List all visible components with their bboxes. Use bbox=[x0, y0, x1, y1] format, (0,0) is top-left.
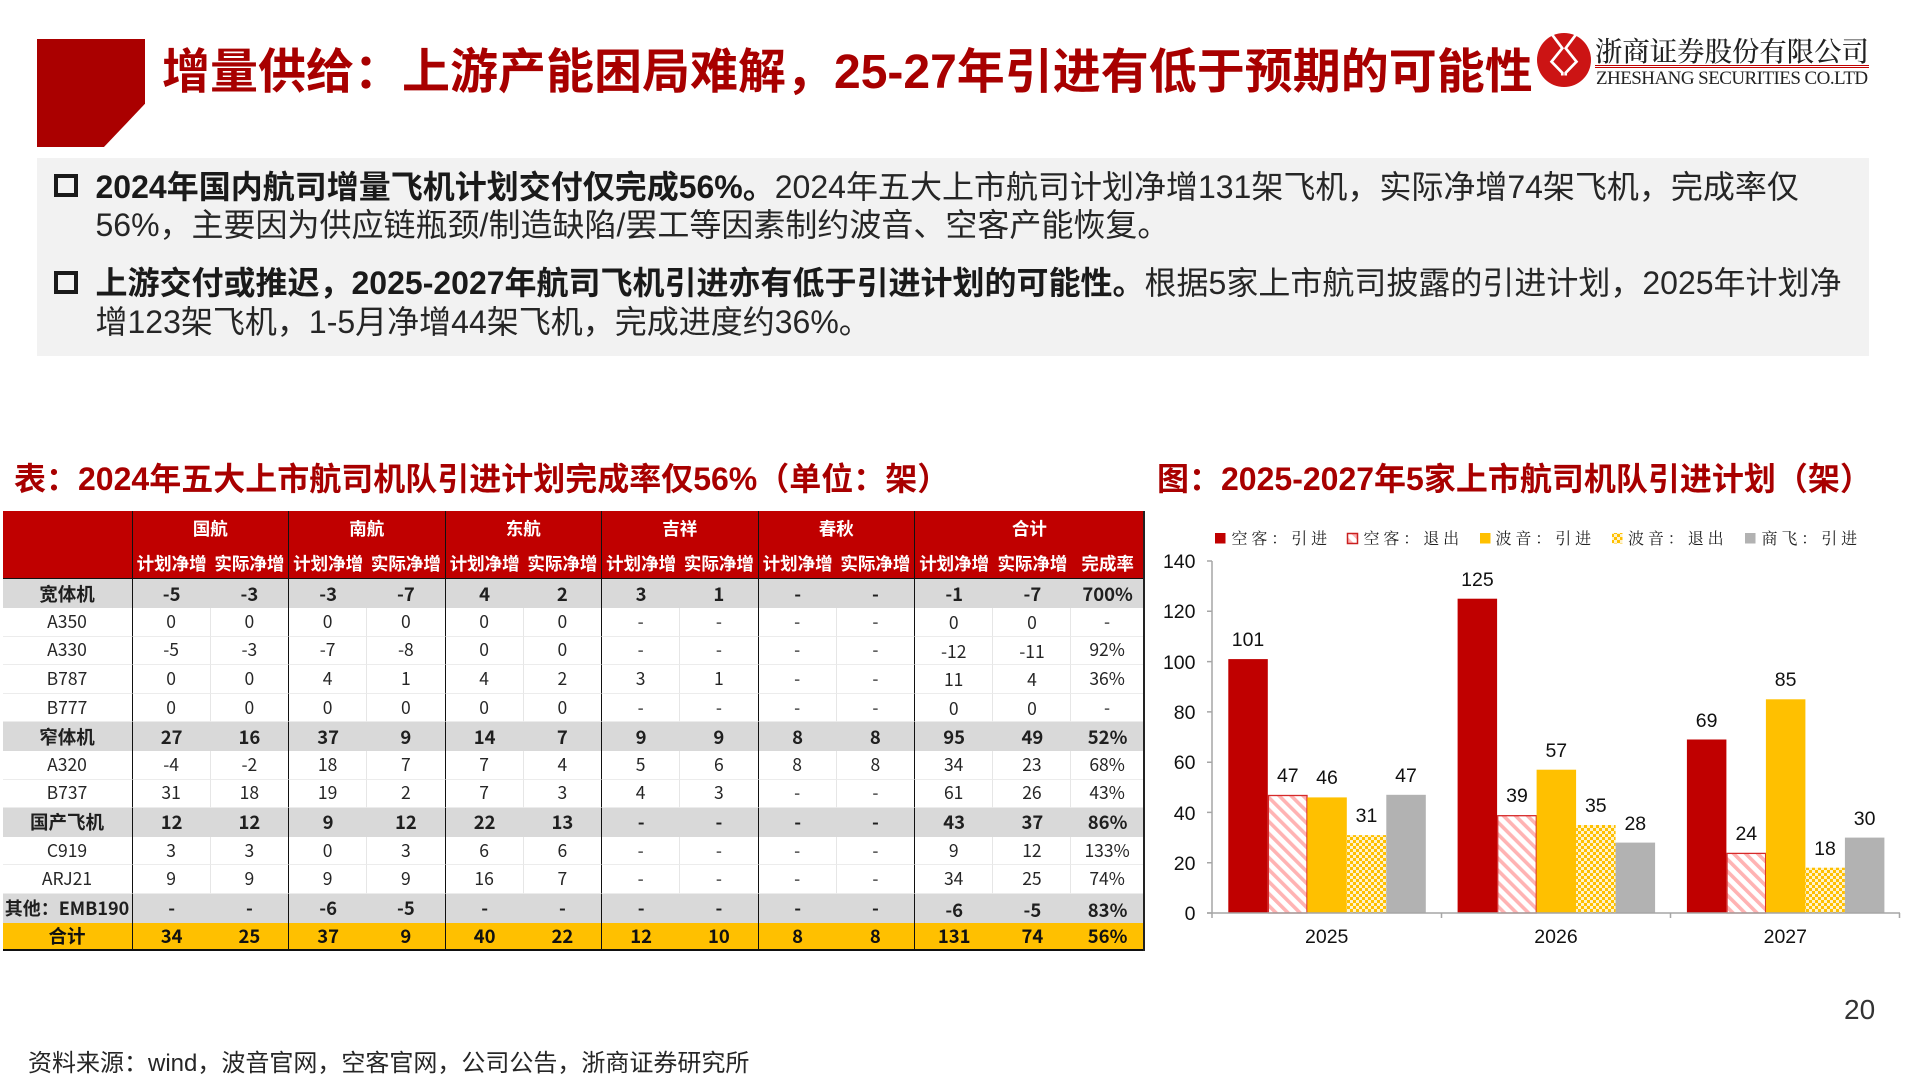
row: 宽体机 bbox=[3, 579, 1143, 608]
row: B777: 0 bbox=[323, 695, 332, 720]
row: 其他 EMB190: - bbox=[559, 895, 566, 921]
icon: logo emblem bbox=[1537, 33, 1591, 87]
row: 合计: 74 bbox=[1022, 923, 1043, 949]
row: C919: C919 bbox=[47, 838, 87, 863]
row: 国产飞机: - bbox=[715, 809, 722, 835]
table header: airlines: 春秋 bbox=[819, 516, 854, 541]
row: 其他 EMB190: - bbox=[715, 895, 722, 921]
row: ARJ21: 7 bbox=[558, 866, 567, 891]
row: 宽体机: 1 bbox=[713, 581, 724, 607]
row: C919: 3 bbox=[245, 838, 254, 863]
row: A330: -11 bbox=[1019, 639, 1045, 664]
table header: airlines: 合计 bbox=[1012, 516, 1047, 541]
row: B777: - bbox=[872, 695, 878, 720]
y axis labels: 60 bbox=[1174, 752, 1196, 774]
row: ARJ21: - bbox=[716, 866, 722, 891]
data labels: 31 bbox=[1356, 805, 1377, 827]
row: A320: 68% bbox=[1089, 752, 1125, 777]
row: A330 bbox=[3, 637, 1143, 665]
row: 窄体机: 52% bbox=[1088, 724, 1127, 750]
row: B737: 26 bbox=[1022, 780, 1042, 805]
legend: 空客：引进 bbox=[1232, 526, 1331, 549]
y axis bbox=[1207, 561, 1212, 913]
row: A320: 8 bbox=[871, 752, 880, 777]
row: B737: 43% bbox=[1089, 780, 1125, 805]
row: 合计: 合计 bbox=[48, 923, 86, 949]
bars: 2027 bbox=[1687, 699, 1884, 913]
table header: metrics: 完成率 bbox=[1081, 551, 1134, 576]
row: A330: A330 bbox=[47, 637, 87, 662]
row: A320: 8 bbox=[792, 752, 802, 777]
row: 国产飞机 bbox=[3, 808, 1143, 837]
table: 2024 fleet plan completion bbox=[3, 511, 1143, 951]
row: A350: 0 bbox=[1027, 610, 1037, 635]
row: C919: - bbox=[716, 838, 722, 863]
row: 其他 EMB190: -5 bbox=[397, 895, 415, 921]
row: B787: - bbox=[872, 666, 878, 691]
row: 窄体机: 9 bbox=[636, 724, 647, 750]
row: 国产飞机: 国产飞机 bbox=[30, 809, 104, 835]
y axis labels: 20 bbox=[1174, 853, 1196, 875]
row: B737: 61 bbox=[944, 780, 963, 805]
row: B777: 0 bbox=[1027, 696, 1037, 721]
row: 窄体机: 37 bbox=[317, 724, 339, 750]
data labels: 28 bbox=[1624, 813, 1646, 835]
row: B737: B737 bbox=[47, 780, 87, 805]
panel: key points bbox=[37, 158, 1869, 356]
row: B777: 0 bbox=[245, 695, 254, 720]
row: 宽体机: 700% bbox=[1082, 581, 1133, 607]
table header: metrics: 实际净增 bbox=[997, 551, 1067, 576]
bullet 2 text line 1: 上游交付或推迟，2025-2027年航司飞机引进亦有低于引进计划的可能性。根据5家上市航司披露的引进计划，2025年计划净 bbox=[96, 265, 1842, 301]
row: A350: 0 bbox=[479, 609, 489, 634]
bullet 1 text line 1: 2024年国内航司增量飞机计划交付仅完成56%。2024年五大上市航司计划净增131架飞机，实际净增74架飞机，完成率仅 bbox=[96, 169, 1799, 205]
row: B787: 3 bbox=[636, 666, 645, 691]
table header: metrics: 计划净增 bbox=[293, 551, 363, 576]
row: 国产飞机: - bbox=[638, 809, 645, 835]
data labels: 101 bbox=[1232, 629, 1264, 651]
bars: 2025 bbox=[1228, 659, 1426, 913]
row: B737: 7 bbox=[479, 780, 489, 805]
data labels: 24 bbox=[1735, 823, 1757, 845]
row: 其他 EMB190: - bbox=[481, 895, 488, 921]
row: B777 bbox=[3, 694, 1143, 722]
table right edge bbox=[1143, 511, 1144, 951]
row: B737: 18 bbox=[240, 780, 259, 805]
row: A330: -7 bbox=[320, 637, 336, 662]
row: 合计: 40 bbox=[474, 923, 496, 949]
data labels bbox=[1232, 569, 1876, 860]
row: A320: 4 bbox=[558, 752, 567, 777]
row: 宽体机: 2 bbox=[557, 581, 568, 607]
row: 窄体机: 8 bbox=[792, 724, 803, 750]
row: 合计: 9 bbox=[400, 923, 411, 949]
legend: 空客：退出 bbox=[1364, 526, 1463, 549]
row: A330: - bbox=[794, 637, 800, 662]
row: C919: - bbox=[794, 838, 800, 863]
table header: metrics: 计划净增 bbox=[919, 551, 989, 576]
row: C919: 0 bbox=[323, 838, 332, 863]
logo English name: ZHESHANG SECURITIES CO.LTD bbox=[1596, 68, 1868, 89]
bullet 2 text line 2: 增123架飞机，1-5月净增44架飞机，完成进度约36%。 bbox=[96, 304, 871, 340]
data labels: 47 bbox=[1277, 765, 1299, 787]
row: ARJ21: ARJ21 bbox=[42, 866, 92, 891]
row: C919: 9 bbox=[949, 838, 959, 863]
row: 其他 EMB190: - bbox=[168, 895, 175, 921]
row: A330: -8 bbox=[398, 637, 414, 662]
row: C919 bbox=[3, 837, 1143, 865]
row: A320: 23 bbox=[1022, 752, 1042, 777]
row: B787: 4 bbox=[323, 666, 332, 691]
row: 国产飞机: 12 bbox=[238, 809, 260, 835]
row: C919: 12 bbox=[1022, 838, 1042, 863]
source note: 资料来源：wind，波音官网，空客官网，公司公告，浙商证券研究所 bbox=[28, 1050, 749, 1077]
row: 合计: 8 bbox=[870, 923, 881, 949]
row: B787: 4 bbox=[1027, 667, 1037, 692]
row: 窄体机 bbox=[3, 722, 1143, 751]
row: 国产飞机: 12 bbox=[161, 809, 183, 835]
row: 宽体机: 3 bbox=[636, 581, 647, 607]
row: 合计: 12 bbox=[630, 923, 652, 949]
row: C919: 6 bbox=[558, 838, 567, 863]
row: 其他 EMB190: -5 bbox=[1024, 897, 1041, 923]
bullet 2 icon bbox=[54, 271, 78, 294]
row: A330: 92% bbox=[1089, 637, 1125, 662]
row: 合计: 37 bbox=[317, 923, 339, 949]
row: ARJ21: 9 bbox=[166, 866, 176, 891]
row: 宽体机: -7 bbox=[397, 581, 415, 607]
row: A350: 0 bbox=[558, 609, 567, 634]
row: A330: - bbox=[638, 637, 644, 662]
row: 国产飞机: 86% bbox=[1088, 809, 1127, 835]
row: A320: A320 bbox=[47, 752, 87, 777]
bars: 2026 bbox=[1458, 599, 1655, 913]
table header: metrics: 计划净增 bbox=[763, 551, 833, 576]
y axis labels: 140 bbox=[1163, 551, 1196, 573]
row: 窄体机: 49 bbox=[1022, 724, 1043, 750]
row: 宽体机: - bbox=[794, 581, 801, 607]
row: B737: 3 bbox=[558, 780, 567, 805]
row: A350: - bbox=[638, 609, 644, 634]
row: B787: 1 bbox=[401, 666, 411, 691]
data labels: 47 bbox=[1395, 765, 1417, 787]
table header: metrics: 实际净增 bbox=[371, 551, 441, 576]
row: A320: 18 bbox=[318, 752, 337, 777]
row: 宽体机: -7 bbox=[1024, 581, 1041, 607]
y axis labels: 100 bbox=[1163, 652, 1196, 674]
row: 其他 EMB190: -6 bbox=[945, 897, 963, 923]
table header: metrics: 实际净增 bbox=[214, 551, 284, 576]
row: A350: 0 bbox=[949, 610, 959, 635]
row: A350: 0 bbox=[166, 609, 176, 634]
row: 合计: 56% bbox=[1088, 923, 1127, 949]
legend bbox=[1215, 526, 1861, 549]
row: 合计: 34 bbox=[161, 923, 183, 949]
table header: airlines: 吉祥 bbox=[662, 516, 697, 541]
row: B787: 0 bbox=[166, 666, 176, 691]
row: 窄体机: 95 bbox=[943, 724, 965, 750]
row: B777: 0 bbox=[479, 695, 489, 720]
row: A330: -12 bbox=[941, 639, 966, 664]
row: 国产飞机: - bbox=[872, 809, 879, 835]
row: 其他 EMB190: 83% bbox=[1088, 897, 1127, 923]
row: B777: - bbox=[1104, 695, 1110, 720]
row: 国产飞机: 37 bbox=[1022, 809, 1043, 835]
row: C919: - bbox=[638, 838, 644, 863]
row: 国产飞机: 22 bbox=[474, 809, 496, 835]
logo Chinese name: 浙商证券股份有限公司 bbox=[1595, 29, 1869, 69]
row: ARJ21: 9 bbox=[401, 866, 411, 891]
row: 其他 EMB190: - bbox=[794, 895, 801, 921]
chart heading: 图：2025-2027年5家上市航司机队引进计划（架） bbox=[1157, 461, 1872, 497]
row: B787: - bbox=[794, 666, 800, 691]
row: 窄体机: 14 bbox=[474, 724, 496, 750]
x axis labels: 2025 bbox=[1305, 926, 1349, 948]
row: A350: 0 bbox=[323, 609, 332, 634]
table header: metrics: 实际净增 bbox=[684, 551, 754, 576]
row: 合计: 10 bbox=[708, 923, 730, 949]
row: A320: 7 bbox=[479, 752, 489, 777]
row: 合计 bbox=[3, 923, 1143, 951]
row: 宽体机: 4 bbox=[479, 581, 490, 607]
row: C919: 3 bbox=[166, 838, 176, 863]
row: ARJ21 bbox=[3, 865, 1143, 894]
row: B777: - bbox=[716, 695, 722, 720]
row: A320: 6 bbox=[714, 752, 724, 777]
row: A350: 0 bbox=[245, 609, 254, 634]
row: 国产飞机: - bbox=[794, 809, 801, 835]
data labels: 39 bbox=[1506, 785, 1528, 807]
row: A320 bbox=[3, 751, 1143, 780]
row: B777: - bbox=[794, 695, 800, 720]
chart: fleet introduction plan 2025-2027 bbox=[1163, 526, 1900, 948]
row: ARJ21: 74% bbox=[1089, 866, 1125, 891]
row: ARJ21: - bbox=[638, 866, 644, 891]
data labels: 46 bbox=[1316, 767, 1338, 789]
data labels: 35 bbox=[1585, 795, 1607, 817]
row: A330: - bbox=[872, 637, 878, 662]
row: A350: 0 bbox=[401, 609, 411, 634]
row: 其他 EMB190: 其他：EMB190 bbox=[5, 895, 129, 921]
row: B777: 0 bbox=[949, 696, 959, 721]
row: 其他 EMB190 bbox=[3, 894, 1143, 923]
table header: airlines: 东航 bbox=[506, 516, 541, 541]
row: 合计: 22 bbox=[551, 923, 573, 949]
table header: airlines: 国航 bbox=[193, 516, 228, 541]
row: B787: B787 bbox=[47, 666, 87, 691]
row: B777: - bbox=[638, 695, 644, 720]
data labels: 69 bbox=[1696, 710, 1717, 732]
bullet 1 text line 2: 56%，主要因为供应链瓶颈/制造缺陷/罢工等因素制约波音、空客产能恢复。 bbox=[96, 207, 1169, 243]
row: B737: 3 bbox=[714, 780, 724, 805]
legend: 波音：引进 bbox=[1496, 526, 1595, 549]
row: 其他 EMB190: - bbox=[638, 895, 645, 921]
title accent block bbox=[37, 39, 145, 147]
table header: airlines: 南航 bbox=[349, 516, 384, 541]
row: 合计: 8 bbox=[792, 923, 803, 949]
row: 窄体机: 9 bbox=[400, 724, 411, 750]
row: B787: 2 bbox=[558, 666, 567, 691]
title: 增量供给：上游产能困局难解，25-27年引进有低于预期的可能性 bbox=[162, 46, 1533, 99]
row: ARJ21: 34 bbox=[944, 866, 963, 891]
row: A330: -3 bbox=[241, 637, 257, 662]
row: ARJ21: - bbox=[794, 866, 800, 891]
row: 窄体机: 8 bbox=[870, 724, 881, 750]
row: 国产飞机: 43 bbox=[943, 809, 965, 835]
row: 窄体机: 窄体机 bbox=[39, 724, 95, 750]
row: C919: 3 bbox=[401, 838, 411, 863]
y axis labels: 0 bbox=[1185, 903, 1196, 925]
row: A330: 0 bbox=[479, 637, 489, 662]
bullet 1 icon bbox=[54, 174, 78, 197]
table header: metrics: 实际净增 bbox=[840, 551, 910, 576]
row: A350: - bbox=[794, 609, 800, 634]
x axis bbox=[1207, 913, 1900, 918]
row: A330: - bbox=[716, 637, 722, 662]
row: ARJ21: - bbox=[872, 866, 878, 891]
y axis labels bbox=[1163, 551, 1196, 925]
row: A320: -2 bbox=[241, 752, 257, 777]
row: C919: 133% bbox=[1084, 838, 1130, 863]
row: 国产飞机: 9 bbox=[323, 809, 334, 835]
row: 窄体机: 27 bbox=[161, 724, 183, 750]
x axis labels: 2026 bbox=[1534, 926, 1578, 948]
table header: metrics: 计划净增 bbox=[606, 551, 676, 576]
y axis labels: 40 bbox=[1174, 803, 1196, 825]
row: 窄体机: 16 bbox=[238, 724, 260, 750]
row: 宽体机: -1 bbox=[945, 581, 963, 607]
row: ARJ21: 25 bbox=[1022, 866, 1042, 891]
row: 宽体机: -3 bbox=[240, 581, 258, 607]
row: A330: 0 bbox=[558, 637, 567, 662]
row: A320: 34 bbox=[944, 752, 963, 777]
row: 国产飞机: 13 bbox=[551, 809, 573, 835]
row: B787: 11 bbox=[944, 667, 963, 692]
row: B787: 1 bbox=[714, 666, 724, 691]
data labels: 57 bbox=[1545, 740, 1567, 762]
row: 宽体机: 宽体机 bbox=[39, 581, 95, 607]
row: 其他 EMB190: -6 bbox=[319, 895, 337, 921]
logo: Zheshang Securities bbox=[1537, 29, 1869, 89]
row: 宽体机: -3 bbox=[319, 581, 337, 607]
row: 合计: 131 bbox=[938, 923, 971, 949]
row: 窄体机: 7 bbox=[557, 724, 568, 750]
row: B737: 31 bbox=[161, 780, 181, 805]
row: A330: -5 bbox=[163, 637, 179, 662]
row: B777: 0 bbox=[558, 695, 567, 720]
row: B737: 2 bbox=[401, 780, 411, 805]
row: B787 bbox=[3, 665, 1143, 694]
legend: 商飞：引进 bbox=[1762, 526, 1861, 549]
table header: metrics bbox=[3, 547, 1143, 579]
row: A320: 5 bbox=[636, 752, 645, 777]
x axis labels: 2027 bbox=[1764, 926, 1807, 948]
y axis labels: 80 bbox=[1174, 702, 1196, 724]
y axis labels: 120 bbox=[1163, 601, 1196, 623]
row: ARJ21: 16 bbox=[474, 866, 494, 891]
row: A320: -4 bbox=[163, 752, 179, 777]
row: ARJ21: 9 bbox=[323, 866, 332, 891]
row: B737: 4 bbox=[636, 780, 645, 805]
table header: metrics: 计划净增 bbox=[450, 551, 520, 576]
row: B737: - bbox=[872, 780, 878, 805]
row: B737 bbox=[3, 780, 1143, 808]
row: 宽体机: - bbox=[872, 581, 879, 607]
page number: 20 bbox=[1844, 994, 1875, 1025]
row: A350 bbox=[3, 608, 1143, 637]
table heading: 表：2024年五大上市航司机队引进计划完成率仅56%（单位：架） bbox=[14, 461, 949, 497]
data labels: 30 bbox=[1854, 808, 1876, 830]
row: B787: 0 bbox=[245, 666, 254, 691]
row: B777: 0 bbox=[401, 695, 411, 720]
row: B777: 0 bbox=[166, 695, 176, 720]
row: B787: 4 bbox=[479, 666, 489, 691]
x axis labels bbox=[1305, 926, 1807, 948]
row: ARJ21: 9 bbox=[245, 866, 254, 891]
table header: metrics: 计划净增 bbox=[137, 551, 207, 576]
row: 合计: 25 bbox=[238, 923, 260, 949]
data labels: 18 bbox=[1814, 838, 1836, 860]
data labels: 125 bbox=[1461, 569, 1494, 591]
row: 国产飞机: 12 bbox=[395, 809, 417, 835]
row: B737: - bbox=[794, 780, 800, 805]
row: A350: - bbox=[1104, 609, 1110, 634]
row: A350: - bbox=[716, 609, 722, 634]
row: A350: - bbox=[872, 609, 878, 634]
row: 宽体机: -5 bbox=[163, 581, 180, 607]
row: B737: 19 bbox=[318, 780, 337, 805]
data labels: 85 bbox=[1775, 669, 1797, 691]
row: C919: 6 bbox=[479, 838, 489, 863]
row: 窄体机: 9 bbox=[713, 724, 724, 750]
row: C919: - bbox=[872, 838, 878, 863]
table header: airlines bbox=[3, 511, 1143, 547]
row: A320: 7 bbox=[401, 752, 411, 777]
row: A350: A350 bbox=[47, 609, 87, 634]
row: B777: B777 bbox=[47, 695, 87, 720]
legend: 波音：退出 bbox=[1628, 526, 1728, 549]
table header: metrics: 实际净增 bbox=[527, 551, 597, 576]
row: 其他 EMB190: - bbox=[872, 895, 879, 921]
row: 其他 EMB190: - bbox=[246, 895, 253, 921]
row: B787: 36% bbox=[1089, 666, 1125, 691]
